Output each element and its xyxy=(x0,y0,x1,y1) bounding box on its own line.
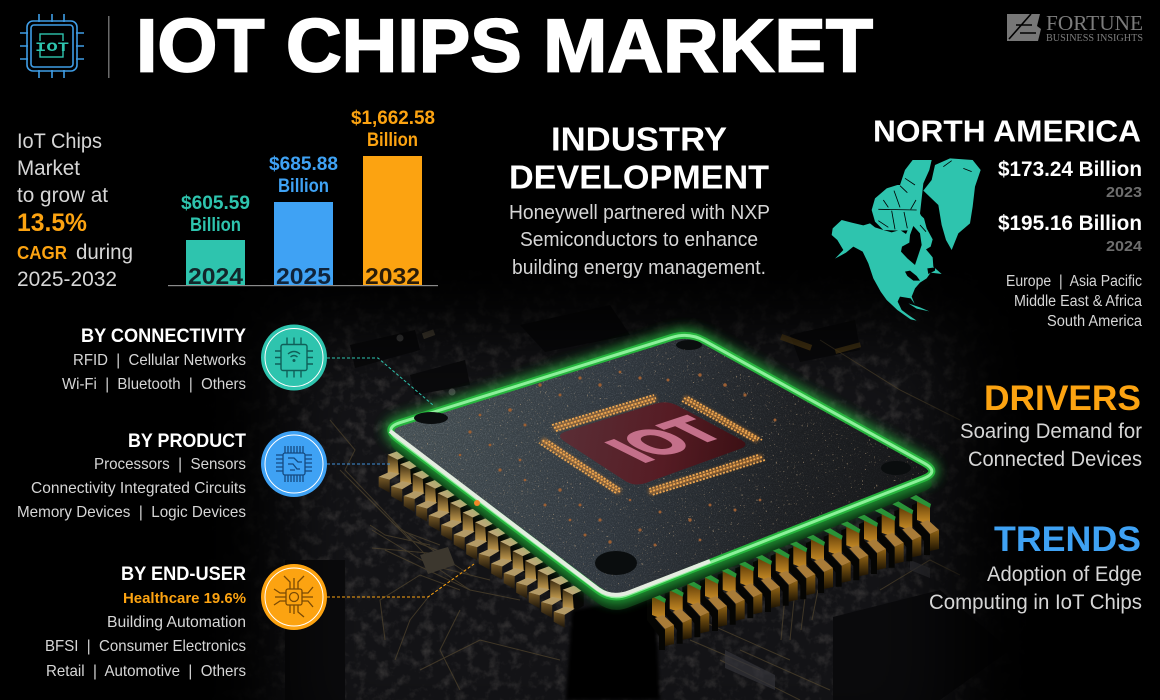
trends xyxy=(929,520,1142,614)
segment: by end-user: Healthcare 19.6% xyxy=(123,590,246,607)
industry development: building energy management. xyxy=(512,257,766,279)
bar 2024: $605.59 xyxy=(181,193,250,214)
segment: by product: Processors | Sensors xyxy=(94,456,246,473)
bar 2032 xyxy=(351,108,435,289)
central die xyxy=(560,402,746,485)
CAGR text block: Market xyxy=(17,157,80,180)
CAGR text block: CAGR xyxy=(17,243,67,263)
segment: by product: BY PRODUCT xyxy=(128,431,246,452)
white rim highlight xyxy=(390,431,710,595)
drivers xyxy=(960,379,1142,471)
copper particles xyxy=(459,371,776,546)
trends: Adoption of Edge xyxy=(987,563,1142,586)
north america values: 2023 xyxy=(1106,184,1142,201)
industry development: DEVELOPMENT xyxy=(509,158,769,196)
segment: by connectivity xyxy=(62,326,246,393)
CAGR text block: during xyxy=(76,241,133,264)
logo: Fortune Business Insights: FORTUNE xyxy=(1046,11,1143,35)
segment: by end-user: Retail | Automotive | Others xyxy=(46,663,246,680)
other regions: Middle East & Africa xyxy=(1014,293,1142,310)
icon: connectivity chip with wifi xyxy=(261,324,327,390)
connector: end-user xyxy=(327,564,474,597)
segment: by end-user: BFSI | Consumer Electronics xyxy=(45,638,246,655)
north america values: 2024 xyxy=(1106,238,1143,255)
bar 2025 xyxy=(269,154,338,289)
segment: by connectivity: Wi-Fi | Bluetooth | Others xyxy=(62,376,246,393)
green glow xyxy=(391,335,932,597)
left side pins xyxy=(379,451,584,628)
black shadow under chip corner xyxy=(566,596,660,700)
bar 2025: 2025 xyxy=(276,263,331,289)
map: North America xyxy=(832,158,981,321)
icon text: IOT xyxy=(35,41,70,55)
north america values: $173.24 Billion xyxy=(998,158,1142,181)
chip illustration xyxy=(379,335,939,700)
bar 2032: Billion xyxy=(367,130,418,151)
die label: IOT xyxy=(592,410,739,469)
bar 2025: $685.88 xyxy=(269,154,338,175)
segment: by product: Memory Devices | Logic Devices xyxy=(17,504,246,521)
icon: product processor xyxy=(261,431,327,497)
logo: Fortune Business Insights: BUSINESS INSIGHTS xyxy=(1046,33,1143,44)
drivers: Connected Devices xyxy=(968,448,1142,471)
drivers: DRIVERS xyxy=(984,379,1141,418)
other regions: Europe | Asia Pacific xyxy=(1006,273,1142,290)
connector: product xyxy=(327,463,390,465)
bar 2025: Billion xyxy=(278,176,329,197)
bar 2032: 2032 xyxy=(365,263,420,289)
segment: by product: Connectivity Integrated Circuits xyxy=(31,480,246,497)
header icon: IoT chip xyxy=(20,14,84,78)
bar chart xyxy=(168,108,438,289)
industry development: INDUSTRY xyxy=(551,120,727,158)
segment: by connectivity: RFID | Cellular Networks xyxy=(73,352,246,369)
CAGR text block: to grow at xyxy=(17,184,108,207)
trends: TRENDS xyxy=(994,520,1141,559)
segment: by end-user xyxy=(45,564,246,680)
CAGR text block: 13.5% xyxy=(17,209,87,237)
chip top surface xyxy=(391,335,932,597)
copper contacts xyxy=(539,395,765,495)
copper contact glow xyxy=(542,398,762,492)
bar 2032: $1,662.58 xyxy=(351,108,435,129)
circuit board background xyxy=(250,301,980,700)
industry development xyxy=(509,120,770,279)
bar 2024 xyxy=(181,193,250,289)
other regions: South America xyxy=(1047,313,1142,330)
bar 2024: Billion xyxy=(190,215,241,236)
green rim xyxy=(391,335,932,597)
CAGR text block: IoT Chips xyxy=(17,130,102,153)
industry development: Semiconductors to enhance xyxy=(520,229,758,251)
north america values: $195.16 Billion xyxy=(998,212,1142,235)
north america heading: NORTH AMERICA xyxy=(873,114,1141,148)
title: IOT CHIPS MARKET xyxy=(136,4,873,88)
logo: Fortune Business Insights xyxy=(1007,11,1143,44)
connector: connectivity xyxy=(327,358,433,405)
icon: end-user brain chip xyxy=(261,564,327,630)
industry development: Honeywell partnered with NXP xyxy=(509,202,770,224)
drivers: Soaring Demand for xyxy=(960,420,1142,443)
bar 2024: 2024 xyxy=(188,263,243,289)
trends: Computing in IoT Chips xyxy=(929,591,1142,614)
chip body side xyxy=(391,348,932,610)
segment: by end-user: BY END-USER xyxy=(121,564,246,585)
corner holes xyxy=(414,340,911,575)
CAGR text block: 2025-2032 xyxy=(17,268,117,291)
connector dot xyxy=(474,500,480,506)
CAGR text block xyxy=(17,130,133,291)
segment: by product xyxy=(17,431,246,521)
segment: by connectivity: BY CONNECTIVITY xyxy=(81,326,246,347)
right side pins xyxy=(645,495,939,650)
segment: by end-user: Building Automation xyxy=(107,614,246,631)
north america values xyxy=(998,158,1143,255)
other regions xyxy=(1006,273,1142,330)
